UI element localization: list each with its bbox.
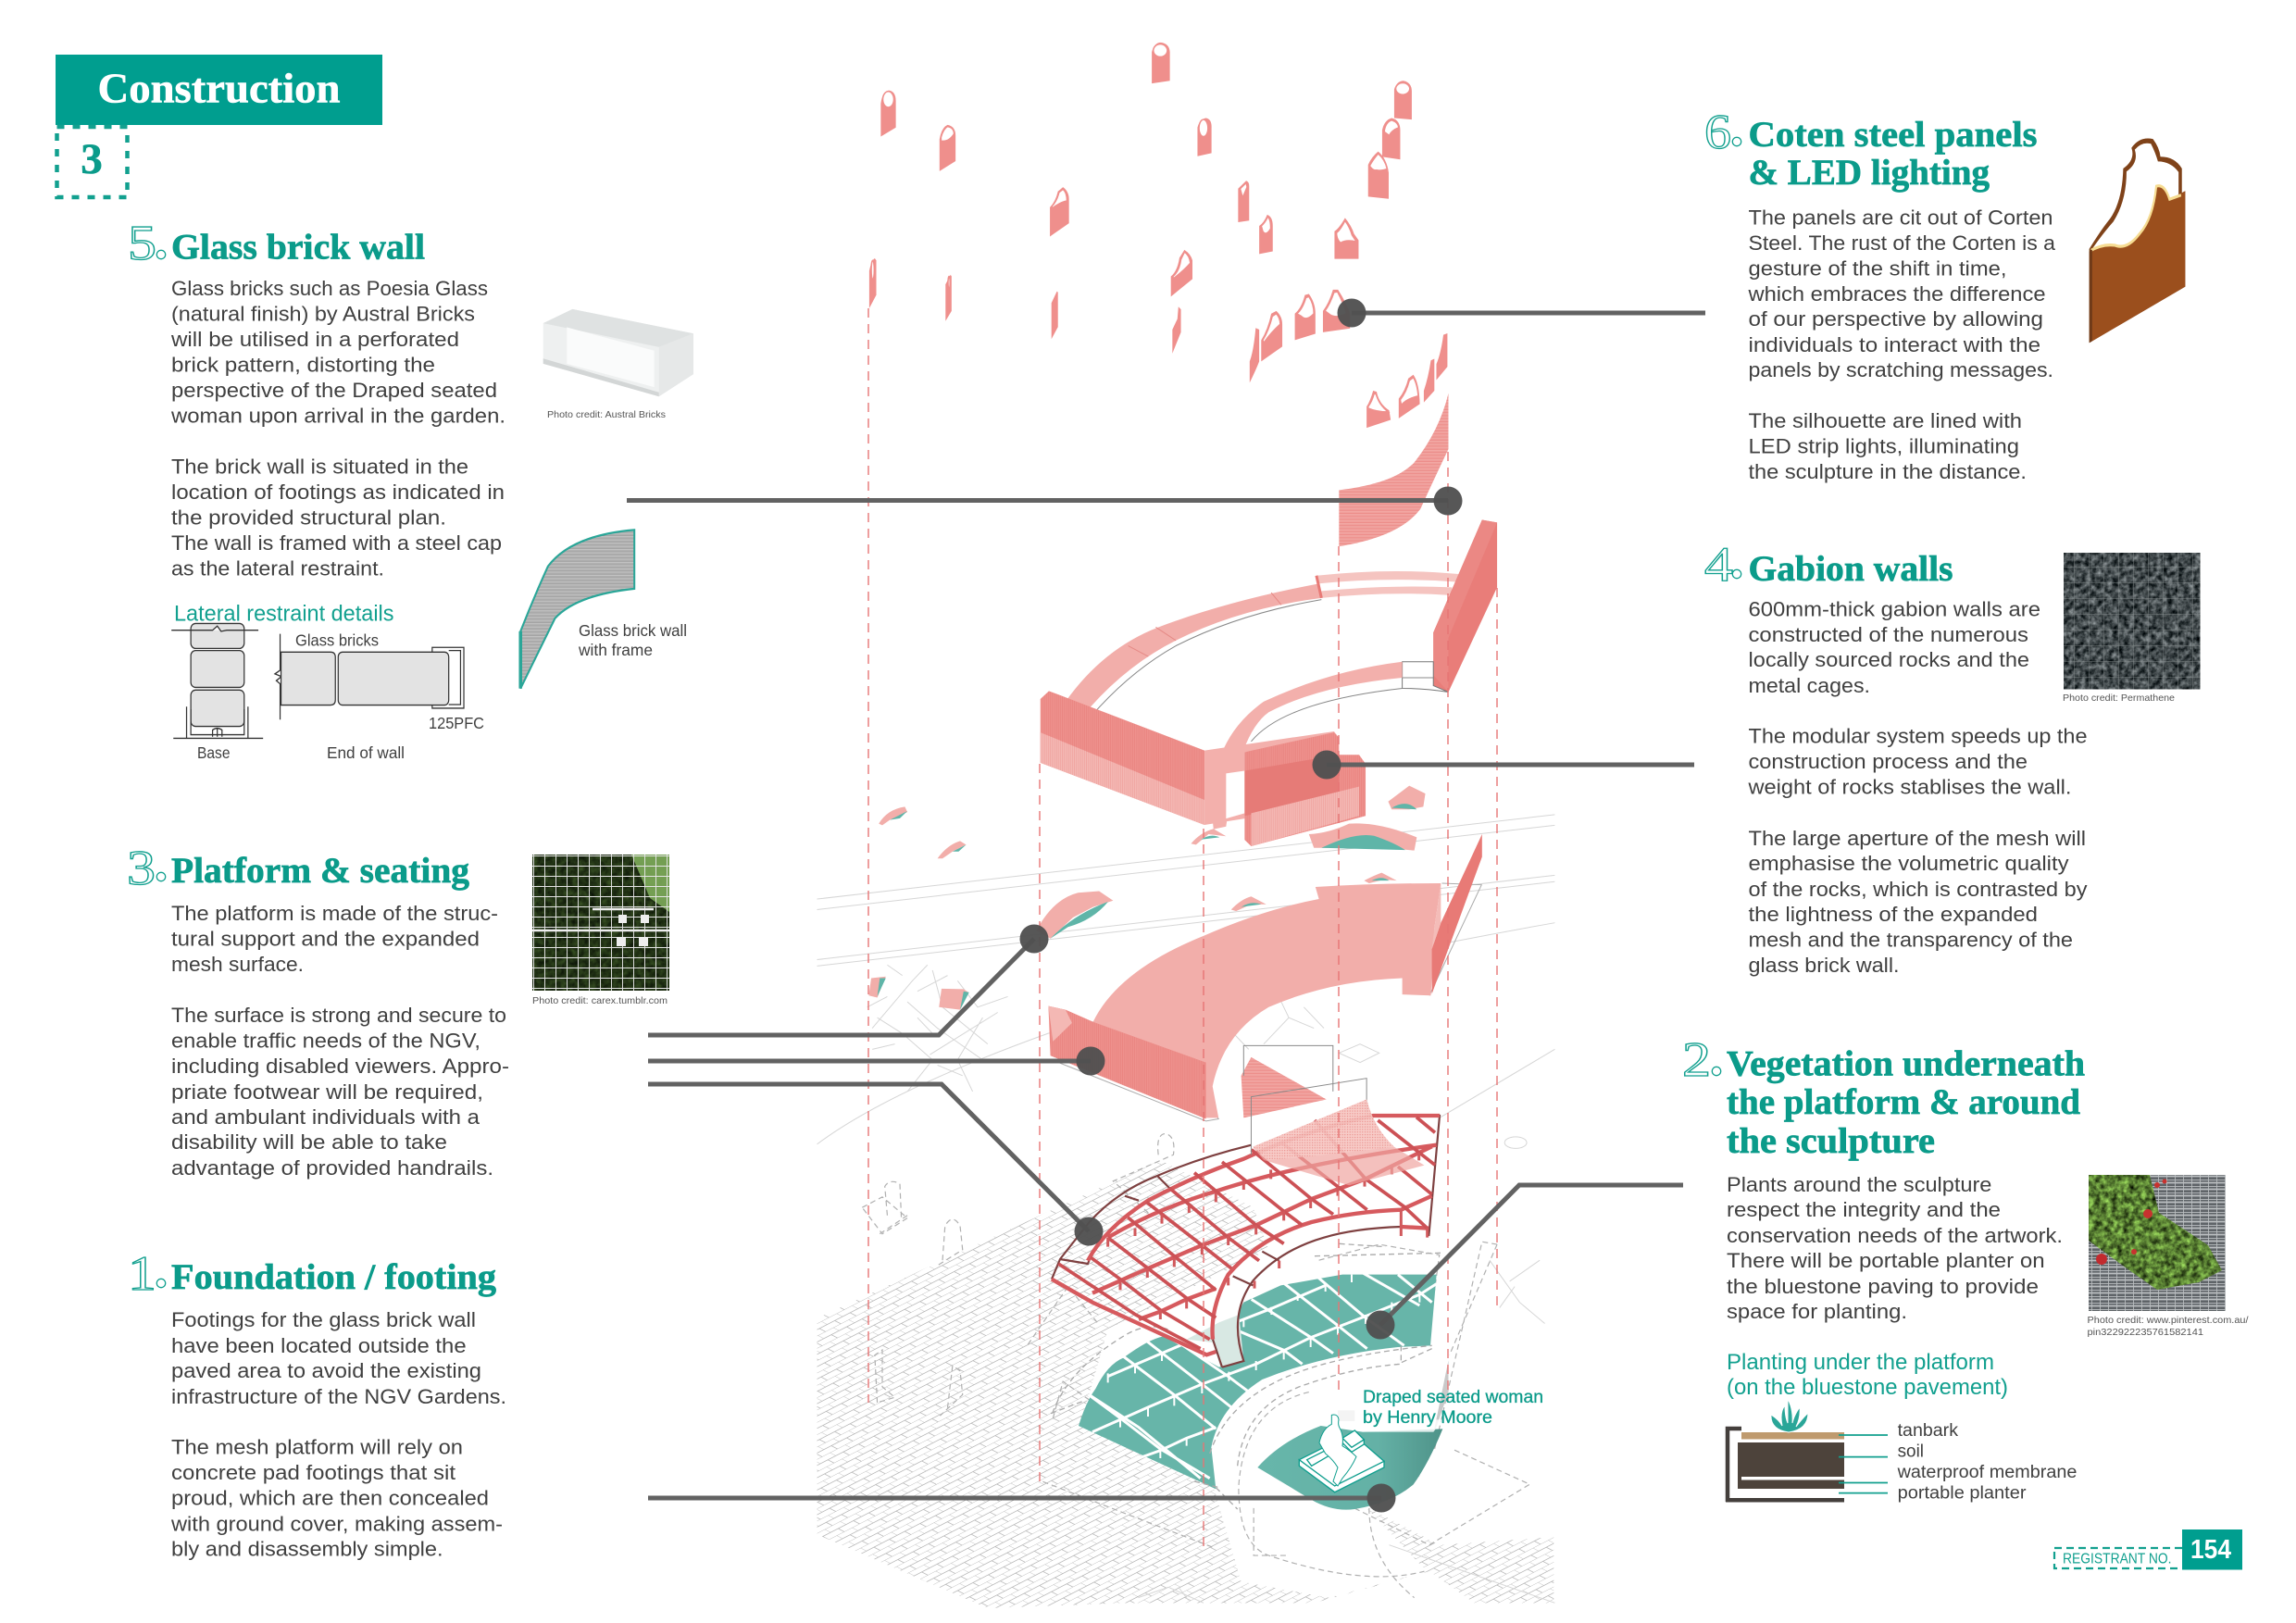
leader: foundation (648, 1483, 1396, 1513)
label: glass brick wall with frame: Glass brick wall (579, 621, 687, 640)
platform support frame (1052, 1116, 1440, 1367)
photo credit: Photo credit: carex.tumblr.com (532, 995, 668, 1006)
heading (1682, 1033, 2085, 1161)
label: glass brick wall with frame: with frame (578, 641, 653, 659)
panel: 2 vegetation (1682, 1033, 2249, 1504)
header: Construction (56, 55, 382, 197)
body text: have been located outside the (171, 1334, 467, 1357)
photo: planting through grating (2089, 1175, 2226, 1311)
subheading: lateral restraint details: Lateral restraint details (174, 602, 394, 627)
body text (1727, 1173, 2063, 1323)
photo credit: Photo credit: www.pinterest.com.au/ (2087, 1315, 2249, 1326)
dashed box (2054, 1548, 2184, 1568)
photo credit: Photo credit: Permathene (2063, 693, 2175, 704)
body text: (natural finish) by Austral Bricks (171, 302, 475, 325)
heading: the platform & around (1727, 1082, 2080, 1122)
section number box (57, 127, 128, 197)
leader: gabion walls (1313, 750, 1694, 780)
body text (171, 902, 509, 1180)
subheading: planting under the platform (1727, 1350, 2008, 1400)
heading (1704, 106, 2037, 193)
diagram labels: End of wall (327, 743, 405, 762)
body text: which embraces the difference (1747, 282, 2046, 306)
title bar (56, 55, 382, 125)
body text: The wall is framed with a steel cap (171, 531, 502, 555)
leader: corten panels (1337, 298, 1705, 328)
diagram: portable planter section (1726, 1429, 1888, 1502)
body text: The modular system speeds up the (1748, 725, 2087, 748)
body text: brick pattern, distorting the (171, 353, 435, 376)
body text: The silhouette are lined with (1748, 409, 2022, 432)
panel: 4 gabion walls (1704, 538, 2200, 977)
body text: The large aperture of the mesh will (1748, 827, 2086, 850)
body text: conservation needs of the artwork. (1727, 1224, 2063, 1247)
heading: Glass brick wall (171, 228, 425, 267)
icon: plant (1771, 1399, 1808, 1432)
photo credit: Photo credit: Austral Bricks (547, 409, 666, 420)
body text: woman upon arrival in the garden. (170, 404, 505, 427)
photo: glass brick (543, 309, 693, 396)
label: draped seated woman: by Henry Moore (1363, 1408, 1492, 1428)
body text: Glass bricks such as Poesia Glass (171, 277, 488, 300)
heading: Coten steel panels (1748, 115, 2037, 155)
body text: The panels are cit out of Corten (1748, 206, 2053, 230)
platform surface (1048, 834, 1482, 1121)
glass brick wall segment (1339, 393, 1448, 546)
body text: constructed of the numerous (1748, 623, 2028, 646)
heading (1704, 538, 1953, 592)
heading: the sculpture (1727, 1121, 1935, 1161)
diagram labels: Base (197, 743, 230, 762)
heading: 3 (127, 842, 156, 895)
body text: LED strip lights, illuminating (1748, 434, 2019, 457)
body text: construction process and the (1748, 750, 2028, 773)
body text: perspective of the Draped seated (171, 379, 497, 402)
photo: gabion rocks (2064, 553, 2200, 689)
body text: Steel. The rust of the Corten is a (1748, 231, 2055, 255)
body text: mesh and the transparency of the (1748, 929, 2073, 952)
panel: 1 foundation and footing (128, 1247, 506, 1561)
body text: metal cages. (1748, 674, 1870, 697)
heading: 1 (128, 1247, 156, 1301)
mesh panel with outline frames (1242, 1045, 1424, 1185)
panel: 6 corten steel panels and LED lighting (1704, 106, 2185, 483)
body text: as the lateral restraint. (171, 556, 384, 580)
planter labels: portable planter (1898, 1484, 2027, 1504)
body text: and ambulant individuals with a (171, 1105, 480, 1129)
body text (170, 1308, 506, 1561)
body text: tural support and the expanded (171, 927, 480, 950)
body text: location of footings as indicated in (171, 481, 505, 504)
leader: vegetation (1366, 1185, 1683, 1339)
axonometric exploded drawing (817, 43, 1554, 1608)
leader: seating (648, 924, 1048, 1035)
body text (170, 277, 505, 580)
heading (128, 217, 425, 270)
gabion walls (1041, 519, 1497, 846)
body text: space for planting. (1727, 1300, 1907, 1323)
subheading: planting under the platform: (on the bluestone pavement) (1727, 1375, 2008, 1400)
photo credit (2087, 1315, 2249, 1338)
heading: 6 (1704, 106, 1731, 159)
body text: enable traffic needs of the NGV, (171, 1030, 480, 1053)
corten steel silhouettes (869, 43, 1447, 428)
panel: 5 glass brick wall (128, 217, 693, 762)
sculpture ground plane (1257, 1410, 1442, 1510)
diagram labels: 125PFC (429, 714, 484, 732)
body text: emphasise the volumetric quality (1748, 852, 2069, 875)
photo credit: pin322922235761582141 (2087, 1327, 2203, 1338)
body text: gesture of the shift in time, (1748, 257, 2007, 280)
heading: Gabion walls (1748, 549, 1953, 589)
diagram labels: Glass bricks (295, 631, 379, 650)
body text: will be utilised in a perforated (170, 328, 459, 351)
heading: Vegetation underneath (1727, 1044, 2085, 1083)
body text: concrete pad footings that sit (171, 1461, 456, 1484)
body text: glass brick wall. (1748, 954, 1900, 977)
body text (1747, 598, 2088, 977)
diagram: lateral restraint end of wall (275, 634, 464, 719)
icon: draped seated woman sculpture (1299, 1415, 1384, 1492)
panel: 3 platform and seating (127, 842, 669, 1180)
heading: Foundation / footing (171, 1257, 497, 1297)
planter labels: soil (1898, 1442, 1924, 1462)
planter labels (1897, 1421, 2077, 1504)
body text: bly and disassembly simple. (171, 1538, 443, 1561)
heading: 4 (1704, 538, 1733, 592)
body text: the sculpture in the distance. (1748, 460, 2027, 483)
image: corten steel panel (2090, 139, 2185, 343)
body text: Footings for the glass brick wall (171, 1308, 476, 1331)
body text: The surface is strong and secure to (171, 1004, 506, 1027)
body text: weight of rocks stablises the wall. (1747, 775, 2072, 798)
body text: There will be portable planter on (1727, 1249, 2045, 1272)
leader: platform structure (648, 1084, 1104, 1246)
body text: infrastructure of the NGV Gardens. (171, 1385, 506, 1408)
registrant number (2054, 1529, 2242, 1570)
heading (128, 1247, 497, 1301)
photo: expanded mesh over planting (532, 855, 669, 991)
label: draped seated woman (1363, 1388, 1543, 1428)
body text: The brick wall is situated in the (171, 455, 468, 478)
site base: paving, trees and ghost lines (817, 815, 1554, 1608)
icon: glass brick wall with frame (520, 530, 634, 689)
heading: Platform & seating (171, 851, 470, 891)
body text: including disabled viewers. Appro- (171, 1055, 509, 1078)
body text: with ground cover, making assem- (170, 1512, 503, 1535)
title: Construction (98, 65, 341, 111)
heading: & LED lighting (1748, 153, 1990, 193)
vegetation: teal planting under platform (1079, 1268, 1437, 1489)
body text: advantage of provided handrails. (171, 1156, 493, 1180)
heading: 5 (128, 217, 156, 270)
body text: the bluestone paving to provide (1727, 1275, 2039, 1298)
body text: 600mm-thick gabion walls are (1748, 598, 2040, 620)
leader: platform (648, 1046, 1105, 1076)
body text: Plants around the sculpture (1727, 1173, 1991, 1196)
body text: paved area to avoid the existing (171, 1359, 481, 1382)
number tab (2182, 1529, 2242, 1570)
body text: proud, which are then concealed (171, 1487, 489, 1509)
leader: glass brick wall (627, 487, 1463, 515)
body text (1747, 206, 2055, 483)
body text: priate footwear will be required, (171, 1080, 483, 1104)
body text: The platform is made of the struc- (171, 902, 498, 925)
subheading: planting under the platform: Planting under the platform (1727, 1350, 1994, 1375)
body text: the lightness of the expanded (1748, 903, 2038, 926)
label: glass brick wall with frame (578, 621, 687, 659)
section number: 3 (81, 135, 103, 183)
body text: The mesh platform will rely on (171, 1435, 463, 1458)
diagram labels (197, 631, 484, 762)
heading (127, 842, 470, 895)
planter labels: tanbark (1898, 1421, 1959, 1441)
vertical dashed alignment lines (868, 308, 1497, 1547)
body text: mesh surface. (171, 953, 304, 976)
body text: of the rocks, which is contrasted by (1748, 878, 2088, 901)
body text: locally sourced rocks and the (1748, 648, 2029, 671)
label: draped seated woman: Draped seated woman (1363, 1388, 1543, 1407)
body text: the provided structural plan. (171, 506, 446, 529)
page number: 154 (2190, 1535, 2231, 1565)
body text: panels by scratching messages. (1748, 358, 2053, 381)
planter labels: waterproof membrane (1897, 1463, 2077, 1482)
heading: 2 (1682, 1033, 1711, 1087)
registrant label: REGISTRANT NO. (2063, 1552, 2172, 1567)
body text: disability will be able to take (171, 1130, 447, 1154)
body text: of our perspective by allowing (1748, 307, 2043, 331)
ghost dashed ring around planting (1051, 1243, 1441, 1509)
body text: respect the integrity and the (1727, 1198, 2001, 1221)
body text: individuals to interact with the (1748, 333, 2040, 356)
mesh seating pieces (868, 786, 1426, 1010)
diagram: lateral restraint base (171, 623, 263, 738)
